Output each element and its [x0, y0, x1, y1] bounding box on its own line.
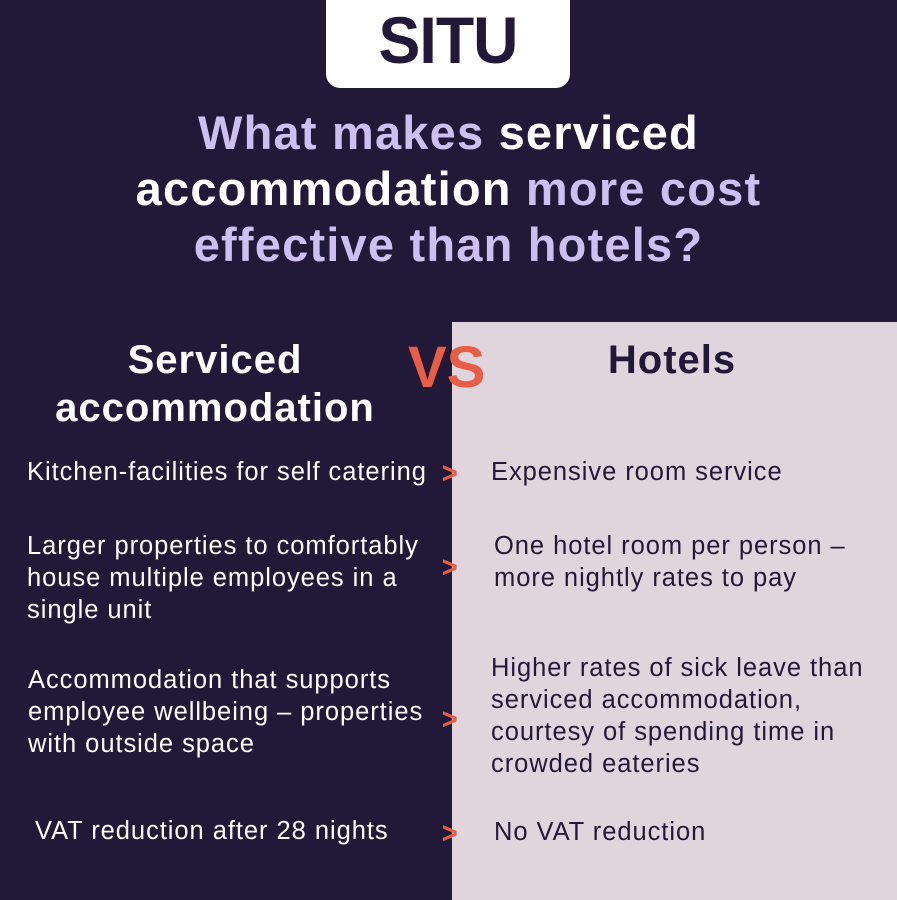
title: effective than hotels?	[194, 218, 703, 271]
logo text: SITU	[378, 3, 518, 77]
arrow 3: >	[442, 703, 458, 736]
arrow 2: >	[442, 551, 458, 584]
heading: serviced accommodation: Serviced	[128, 338, 302, 382]
arrow 1: >	[442, 457, 458, 490]
heading: serviced accommodation	[55, 338, 375, 430]
row 3 left: Accommodation that supports employee wellbeing – properties with outside space	[28, 666, 423, 758]
row 2 right: One hotel room per person – more nightly rates to pay	[494, 532, 846, 592]
logo box	[326, 0, 570, 88]
row 3 right: Higher rates of sick leave than serviced accommodation, courtesy of spending time in crowded eateries	[491, 654, 863, 778]
title	[136, 106, 761, 271]
right panel: hotels background	[452, 322, 897, 900]
row 1 left: Kitchen-facilities for self catering	[27, 458, 427, 486]
heading: serviced accommodation: accommodation	[55, 386, 375, 430]
row 4 right: No VAT reduction	[494, 818, 706, 846]
heading: hotels: Hotels	[608, 338, 736, 382]
VS label: VS	[408, 335, 485, 400]
arrow 4: >	[442, 817, 458, 850]
title: What makes serviced	[198, 106, 699, 159]
row 1 right: Expensive room service	[491, 458, 783, 486]
row 2 left: Larger properties to comfortably house multiple employees in a single unit	[27, 532, 419, 624]
row 4 left: VAT reduction after 28 nights	[35, 817, 389, 845]
title: accommodation more cost	[136, 162, 761, 215]
